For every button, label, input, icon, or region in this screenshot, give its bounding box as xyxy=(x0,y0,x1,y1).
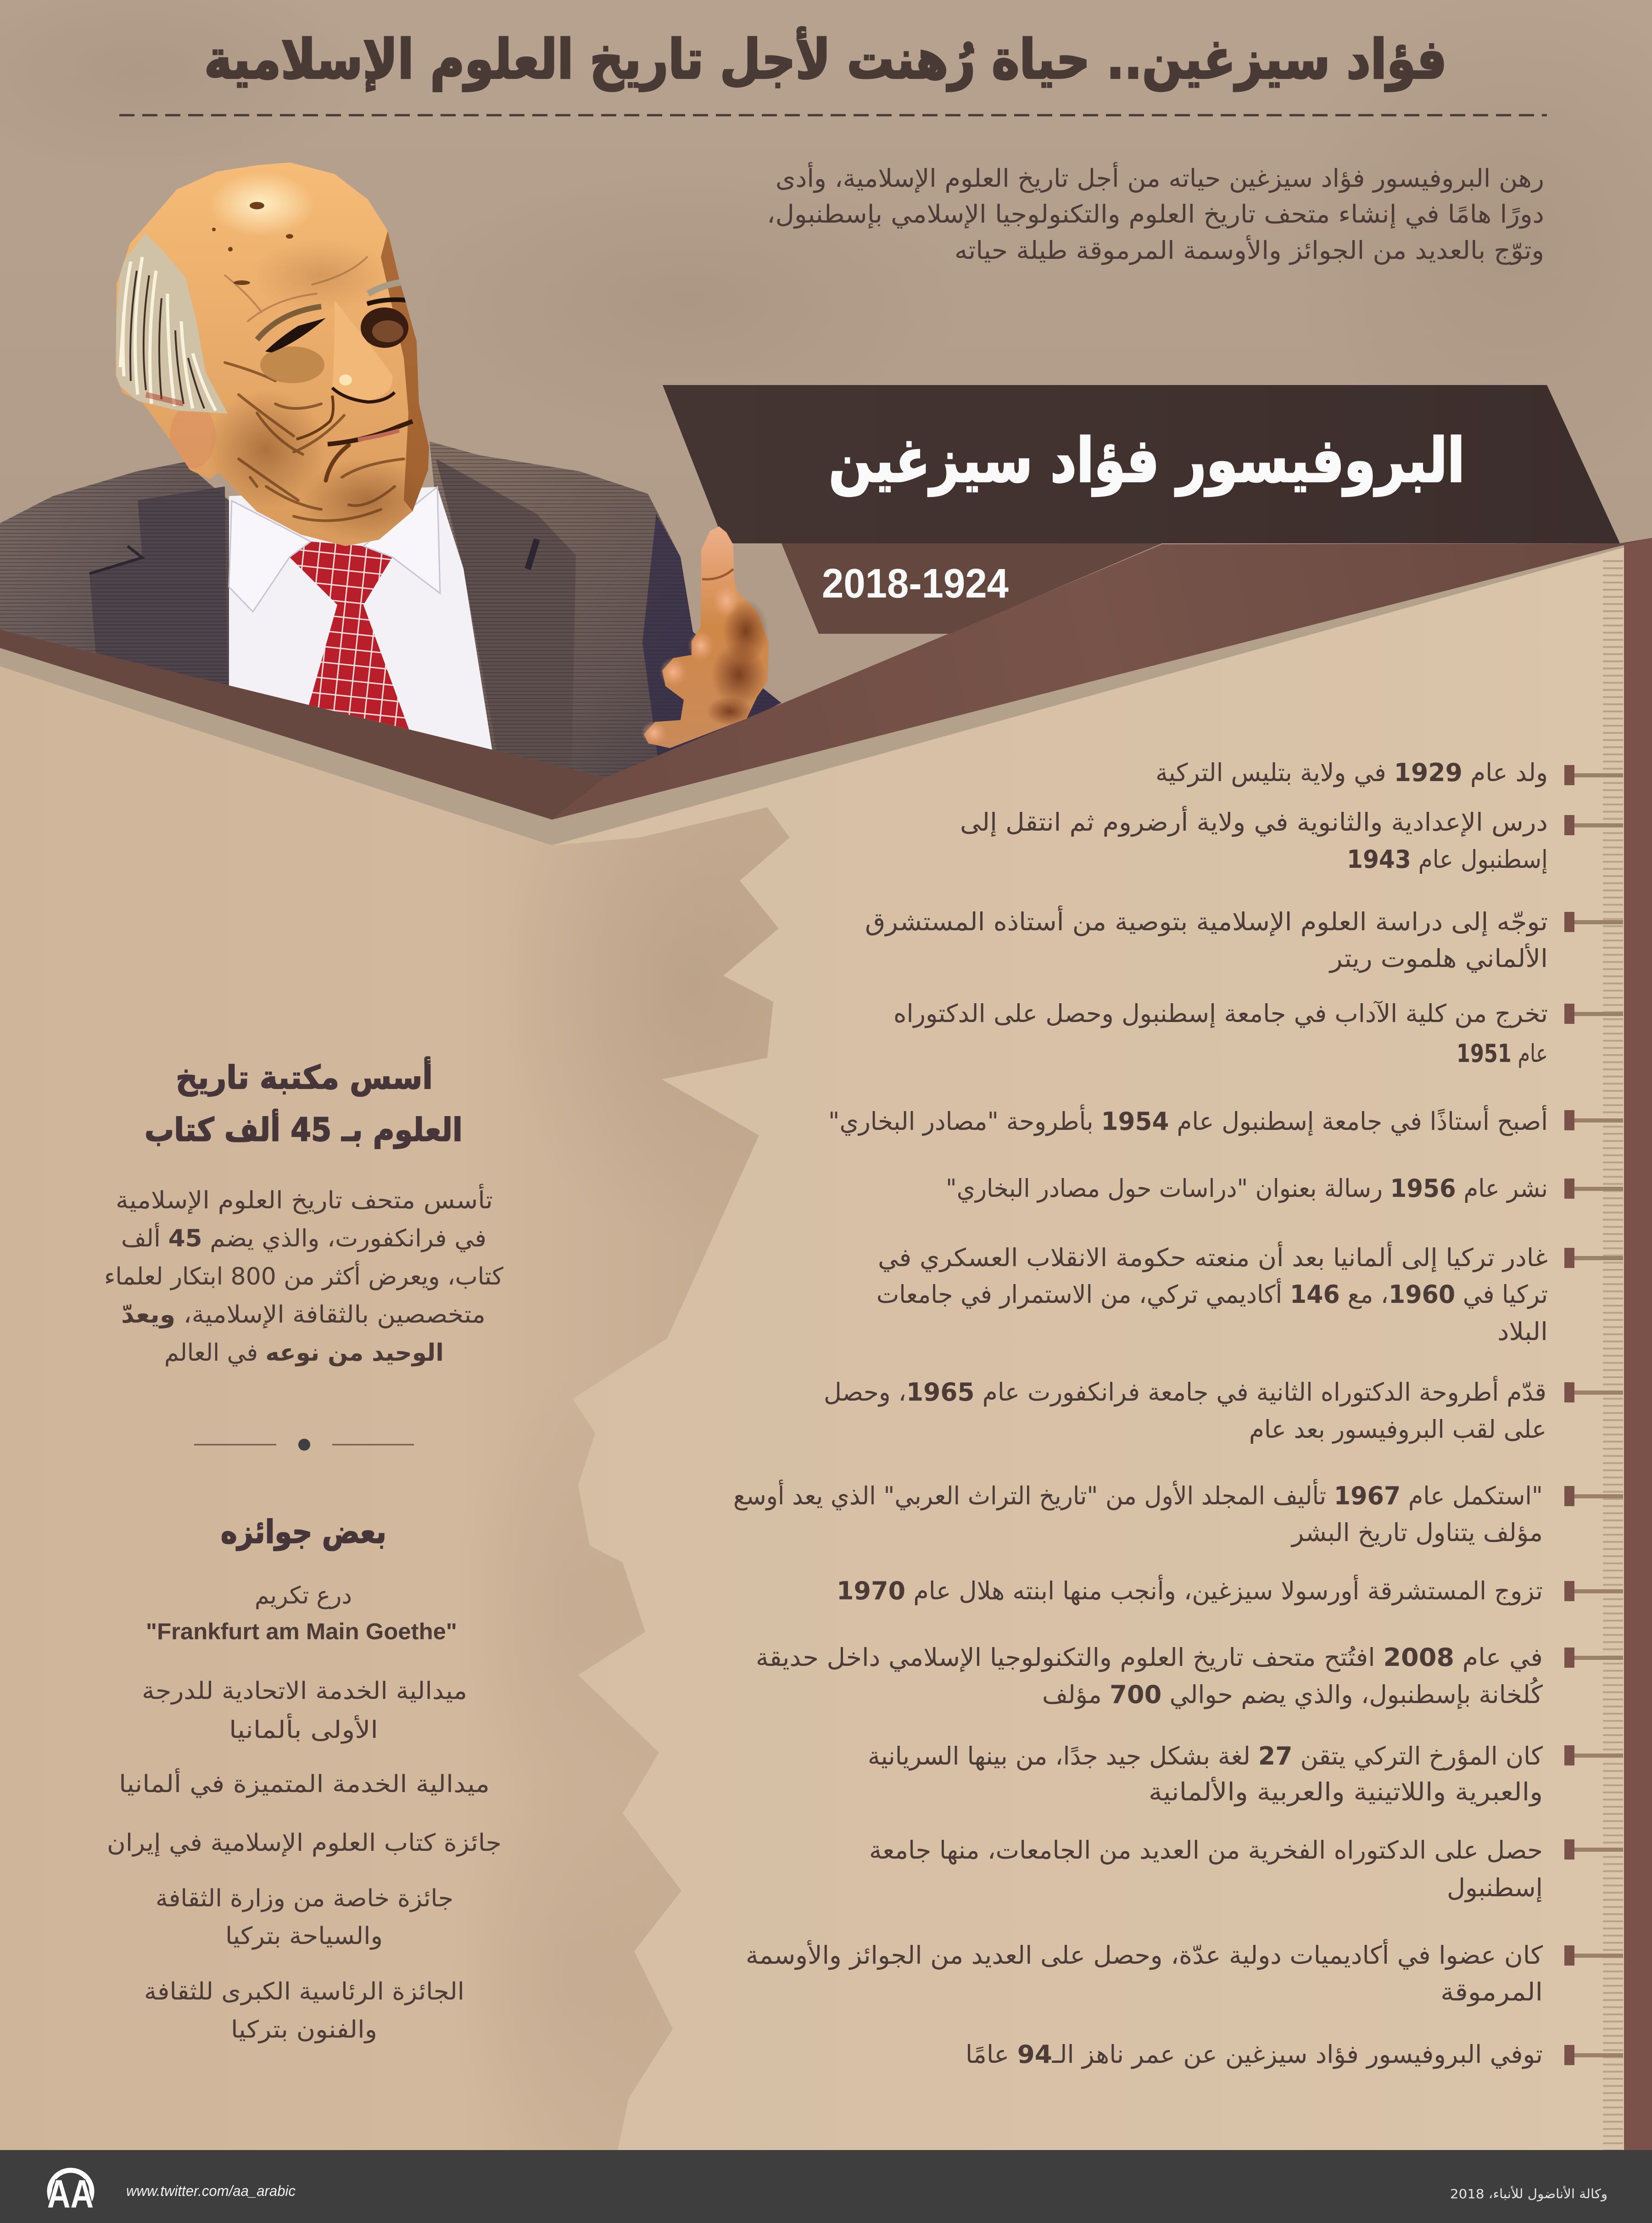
timeline entries: توفي البروفيسور فؤاد سيزغين عن عمر ناهز الـ94 عامًا xyxy=(966,2040,1543,2069)
panel: awards xyxy=(107,1513,502,2044)
timeline entries: الألماني هلموت ريتر xyxy=(1328,943,1548,973)
awards list: الجائزة الرئاسية الكبرى للثقافة xyxy=(144,1978,464,2005)
collar xyxy=(229,487,440,612)
tie xyxy=(290,542,411,734)
library paragraph: تأسس متحف تاريخ العلوم الإسلامية xyxy=(116,1184,493,1214)
dates: 2018-1924 xyxy=(822,561,1009,607)
awards list: جائزة كتاب العلوم الإسلامية في إيران xyxy=(107,1829,502,1857)
divider xyxy=(194,1439,414,1451)
mouth xyxy=(296,396,413,444)
icon: AA logo: AA xyxy=(47,2172,94,2216)
intro paragraph: وتوّج بالعديد من الجوائز والأوسمة المرموقة طيلة حياته xyxy=(954,235,1544,265)
intro paragraph: دورًا هامًا في إنشاء متحف تاريخ العلوم والتكنولوجيا الإسلامي بإسطنبول، xyxy=(767,200,1544,229)
timeline entries: تركيا في 1960، مع 146 أكاديمي تركي، من الاستمرار في جامعات xyxy=(876,1278,1548,1309)
library paragraph xyxy=(104,1184,503,1367)
timeline entries: والعبرية واللاتينية والعربية والألمانية xyxy=(1149,1776,1543,1806)
awards list: ميدالية الخدمة الاتحادية للدرجة xyxy=(142,1677,467,1705)
timeline entries: في عام 2008 افتُتح متحف تاريخ العلوم والتكنولوجيا الإسلامي داخل حديقة xyxy=(756,1643,1543,1672)
library paragraph: في فرانكفورت، والذي يضم 45 ألف xyxy=(121,1223,486,1252)
upper background xyxy=(0,0,1652,826)
timeline entries: إسطنبول xyxy=(1447,1873,1543,1902)
shirt xyxy=(229,487,493,757)
library heading: العلوم بـ 45 ألف كتاب xyxy=(145,1109,463,1149)
hand xyxy=(641,526,769,748)
timeline entries: غادر تركيا إلى ألمانيا بعد أن منعته حكومة الانقلاب العسكري في xyxy=(878,1241,1548,1272)
library paragraph: الوحيد من نوعه في العالم xyxy=(164,1339,444,1367)
intro paragraph: رهن البروفيسور فؤاد سيزغين حياته من أجل تاريخ العلوم الإسلامية، وأدى xyxy=(776,162,1544,193)
chevron band: left xyxy=(0,630,606,820)
timeline entries: على لقب البروفيسور بعد عام xyxy=(1249,1415,1546,1444)
hair xyxy=(116,233,228,413)
timeline entries: المرموقة xyxy=(1440,1977,1543,2006)
brows and eyes xyxy=(257,282,408,383)
chevron band: right xyxy=(552,538,1652,820)
timeline entries: إسطنبول عام 1943 xyxy=(1347,845,1548,874)
timeline entries: أصبح أستاذًا في جامعة إسطنبول عام 1954 بأطروحة "مصادر البخاري" xyxy=(828,1104,1548,1136)
twitter link: www.twitter.com/aa_arabic xyxy=(126,2183,296,2199)
intro paragraph xyxy=(767,162,1544,265)
timeline entries: حصل على الدكتوراه الفخرية من العديد من الجامعات، منها جامعة xyxy=(869,1836,1543,1865)
awards list: والسياحة بتركيا xyxy=(225,1922,383,1950)
timeline xyxy=(733,758,1623,2069)
awards heading: بعض جوائزه xyxy=(221,1513,386,1551)
name heading: البروفيسور فؤاد سيزغين xyxy=(829,425,1465,497)
library paragraph: كتاب، ويعرض أكثر من 800 ابتكار لعلماء xyxy=(104,1261,503,1290)
timeline entries: كان عضوا في أكاديميات دولية عدّة، وحصل على العديد من الجوائز والأوسمة xyxy=(746,1939,1543,1970)
timeline entries: كان المؤرخ التركي يتقن 27 لغة بشكل جيد جدًا، من بينها السريانية xyxy=(868,1742,1543,1771)
awards list: الأولى بألمانيا xyxy=(229,1713,378,1744)
portrait: Fuat Sezgin xyxy=(0,156,781,789)
library heading: أسس مكتبة تاريخ xyxy=(176,1056,433,1096)
timeline entries: البلاد xyxy=(1497,1317,1548,1346)
wrinkles xyxy=(225,257,404,521)
timeline markers xyxy=(1564,765,1623,2065)
timeline entries: "استكمل عام 1967 تأليف المجلد الأول من "تاريخ التراث العربي" الذي يعد أوسع xyxy=(733,1479,1543,1511)
title: فؤاد سيزغين.. حياة رُهنت لأجل تاريخ العلوم الإسلامية xyxy=(204,27,1447,91)
copyright: وكالة الأناضول للأنباء، 2018 xyxy=(1450,2185,1607,2201)
ruler ticks xyxy=(1603,560,1623,2150)
band shadow xyxy=(0,542,1624,845)
timeline entries: عام 1951 xyxy=(1457,1039,1548,1068)
jacket xyxy=(0,441,781,789)
timeline entries xyxy=(733,758,1548,2069)
awards list: "Frankfurt am Main Goethe" xyxy=(146,1619,457,1644)
timeline entries: درس الإعدادية والثانوية في ولاية أرضروم ثم انتقل إلى xyxy=(960,806,1548,837)
timeline entries: كُلخانة بإسطنبول، والذي يضم حوالي 700 مؤلف xyxy=(1042,1677,1543,1709)
right side bar xyxy=(1624,538,1652,2152)
upper paper shading xyxy=(0,0,1652,486)
paper stain xyxy=(0,642,881,2180)
library paragraph: متخصصين بالثقافة الإسلامية، ويعدّ xyxy=(121,1301,486,1329)
awards list: جائزة خاصة من وزارة الثقافة xyxy=(156,1885,453,1912)
timeline entries: قدّم أطروحة الدكتوراه الثانية في جامعة فرانكفورت عام 1965، وحصل xyxy=(824,1376,1546,1407)
awards list: والفنون بتركيا xyxy=(231,2016,377,2044)
face shading xyxy=(170,231,436,542)
lower paper background xyxy=(0,538,1652,2152)
head xyxy=(110,156,441,551)
footer xyxy=(0,2150,1652,2223)
library heading xyxy=(145,1056,463,1149)
timeline entries: ولد عام 1929 في ولاية بتليس التركية xyxy=(1155,758,1548,787)
panel: library xyxy=(104,1056,503,1367)
awards list: درع تكريم xyxy=(255,1582,352,1609)
awards list: ميدالية الخدمة المتميزة في ألمانيا xyxy=(119,1768,490,1798)
timeline entries: تخرج من كلية الآداب في جامعة إسطنبول وحصل على الدكتوراه xyxy=(893,999,1548,1028)
date ribbon xyxy=(781,543,1162,634)
timeline entries: تزوج المستشرقة أورسولا سيزغين، وأنجب منها ابنته هلال عام 1970 xyxy=(837,1575,1543,1605)
name banner xyxy=(663,385,1620,543)
nose xyxy=(332,300,395,402)
timeline entries: مؤلف يتناول تاريخ البشر xyxy=(1290,1518,1543,1547)
forehead highlight xyxy=(209,172,314,236)
dashed rule xyxy=(119,114,1547,117)
timeline entries: نشر عام 1956 رسالة بعنوان "دراسات حول مصادر البخاري" xyxy=(946,1174,1548,1203)
awards list xyxy=(107,1582,502,2044)
spots xyxy=(212,202,293,285)
timeline entries: توجّه إلى دراسة العلوم الإسلامية بتوصية من أستاذه المستشرق xyxy=(865,905,1548,936)
